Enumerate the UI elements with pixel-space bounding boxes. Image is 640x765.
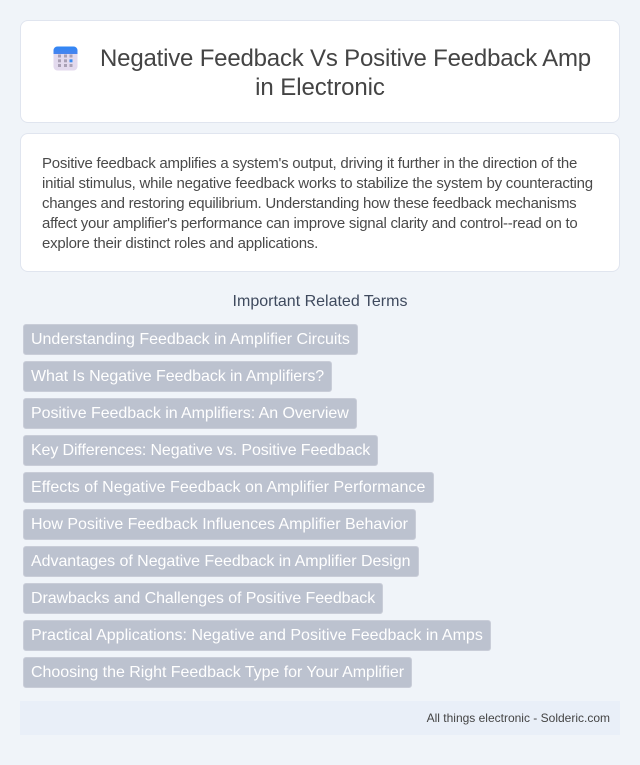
tag bbox=[23, 509, 416, 540]
tag: How Positive Feedback Influences Amplifier Behavior bbox=[31, 516, 408, 533]
text block: intro paragraph: changes and restoring equilibrium. Understanding how these feedback mechanisms bbox=[42, 195, 576, 212]
tag bbox=[23, 583, 383, 614]
tag bbox=[23, 324, 358, 355]
title bbox=[100, 45, 591, 101]
tag: Positive Feedback in Amplifiers: An Overview bbox=[31, 405, 349, 422]
tag: Understanding Feedback in Amplifier Circuits bbox=[31, 331, 350, 348]
tag: Practical Applications: Negative and Positive Feedback in Amps bbox=[31, 627, 483, 644]
text block: intro paragraph: initial stimulus, while negative feedback works to stabilize the system by counteracting bbox=[42, 175, 593, 192]
tag: Choosing the Right Feedback Type for Your Amplifier bbox=[31, 664, 404, 681]
tag: Key Differences: Negative vs. Positive Feedback bbox=[31, 442, 370, 459]
panel: title card bbox=[20, 20, 620, 123]
tag bbox=[23, 657, 412, 688]
tag: Drawbacks and Challenges of Positive Feedback bbox=[31, 590, 375, 607]
title: Negative Feedback Vs Positive Feedback Amp bbox=[100, 45, 591, 72]
tag bbox=[23, 361, 332, 392]
list: related terms bbox=[23, 324, 491, 688]
tag bbox=[23, 546, 419, 577]
tag: Effects of Negative Feedback on Amplifier Performance bbox=[31, 479, 425, 496]
footer bbox=[20, 701, 620, 735]
heading: related terms: Important Related Terms bbox=[233, 293, 407, 310]
title: in Electronic bbox=[255, 74, 385, 101]
footer: All things electronic - Solderic.com bbox=[427, 711, 610, 725]
icon: calendar bbox=[54, 46, 78, 70]
tag bbox=[23, 435, 378, 466]
text block: intro paragraph: explore their distinct roles and applications. bbox=[42, 235, 318, 252]
panel: intro text bbox=[20, 133, 620, 272]
text block: intro paragraph: affect your amplifier's performance can improve signal clarity and control--read on to bbox=[42, 215, 577, 232]
tag bbox=[23, 472, 434, 503]
tag: What Is Negative Feedback in Amplifiers? bbox=[31, 368, 324, 385]
text block: intro paragraph bbox=[42, 155, 593, 252]
tag: Advantages of Negative Feedback in Amplifier Design bbox=[31, 553, 411, 570]
tag bbox=[23, 398, 357, 429]
tag bbox=[23, 620, 491, 651]
text block: intro paragraph: Positive feedback amplifies a system's output, driving it further in the direction of the bbox=[42, 155, 577, 172]
